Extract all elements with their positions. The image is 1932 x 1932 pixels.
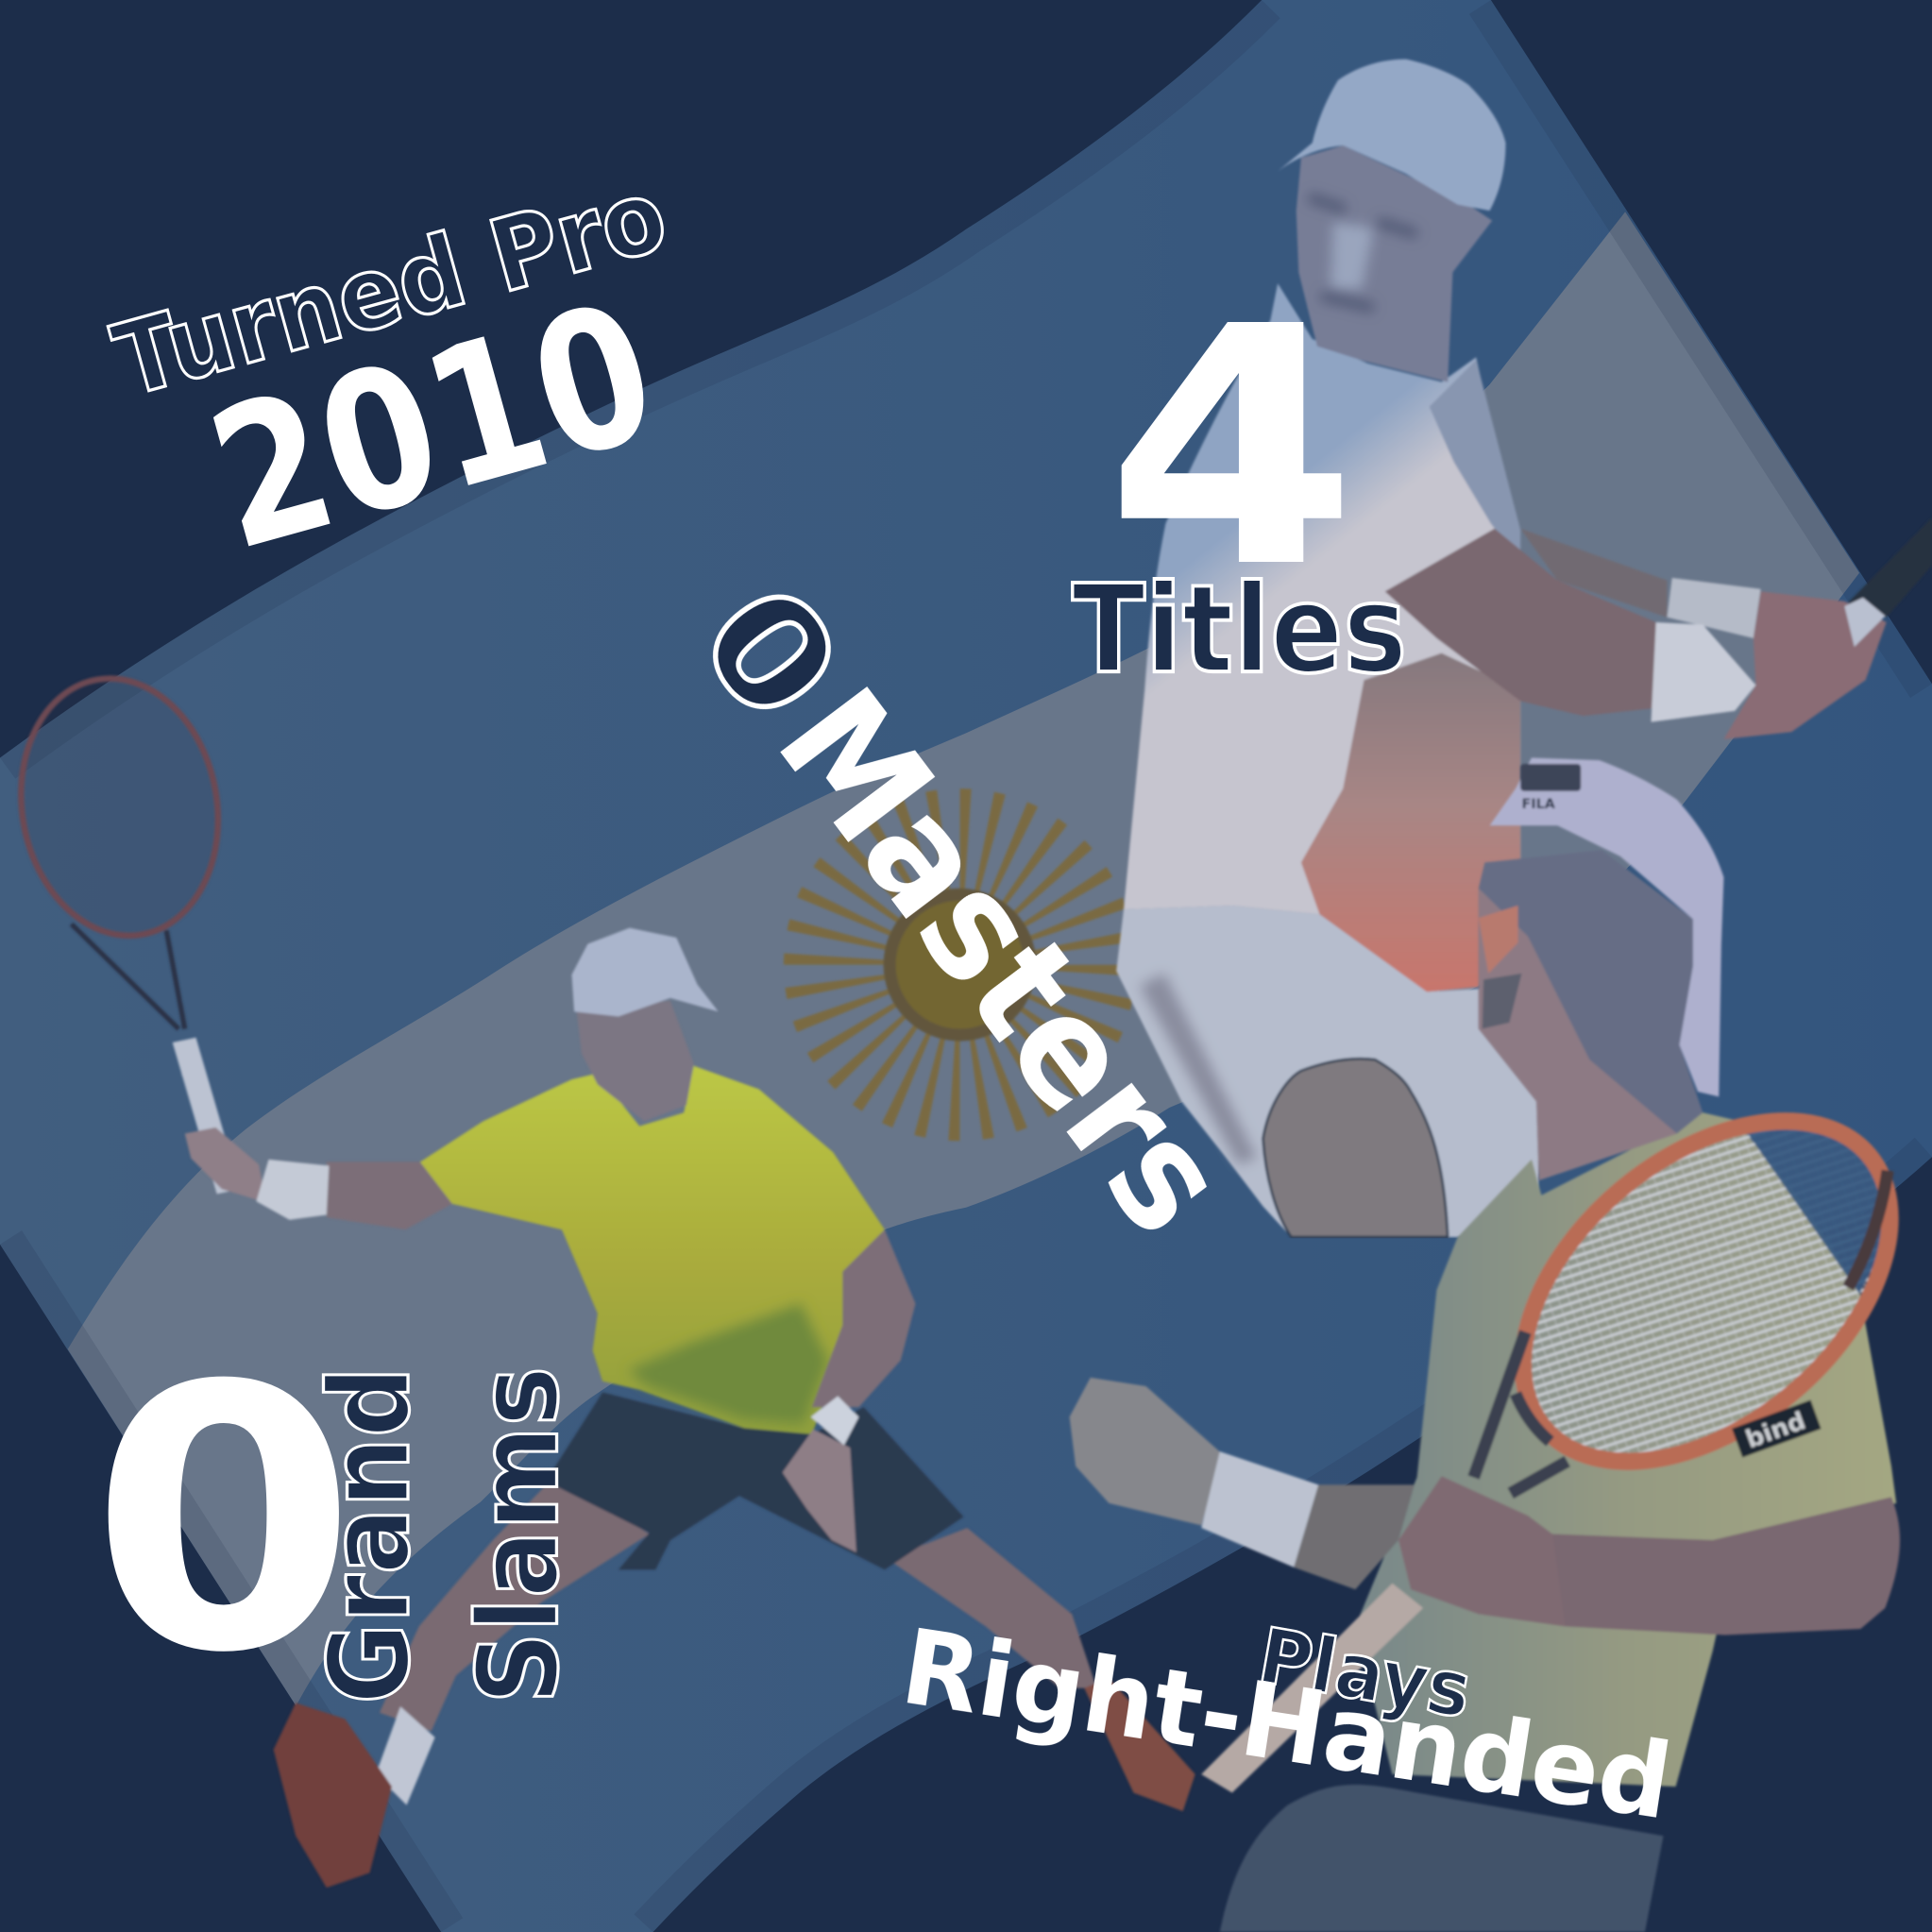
grip [1844, 598, 1885, 647]
shoe [1084, 1678, 1195, 1811]
face overlap tint [1479, 889, 1677, 1180]
head [577, 1001, 694, 1121]
shirt camouflage hem [628, 1304, 828, 1424]
face and neck [1479, 850, 1703, 1180]
racket [1467, 1110, 1900, 1500]
racket [1, 663, 238, 1029]
trousers [1220, 1785, 1664, 1932]
stat: masters [665, 555, 1261, 1265]
label: Grand: Grand [305, 1366, 434, 1704]
face highlight [1330, 222, 1374, 290]
label: Titles: Titles [1072, 559, 1407, 701]
shirt panel [1301, 653, 1520, 991]
shirt [1122, 283, 1496, 916]
hand [783, 1430, 856, 1552]
hand [185, 1127, 266, 1203]
label: Slams: Slams [454, 1366, 584, 1704]
shirt [1355, 1112, 1896, 1787]
photo: player backhand in white shirt [1116, 59, 1932, 1237]
logo: sponsor patch [1732, 1400, 1822, 1458]
number: 2010: 2010 [189, 260, 676, 593]
label: Masters: Masters [744, 659, 1261, 1265]
near leg [380, 1475, 650, 1731]
flag white stripe [68, 212, 1859, 1706]
shorts pattern [1140, 974, 1257, 1164]
wristband with logo [1651, 622, 1755, 722]
upper arm [1552, 1497, 1900, 1635]
shirt pattern [1430, 360, 1520, 562]
shoe [274, 1703, 392, 1888]
stat: plays [894, 1606, 1679, 1843]
nose tint [1479, 906, 1518, 974]
number: 4: 4 [1105, 258, 1358, 640]
back arm [1520, 529, 1667, 618]
fist [1070, 1378, 1222, 1525]
sock [376, 1706, 435, 1805]
number: 0: 0 [90, 1309, 357, 1732]
near arm [1385, 529, 1674, 716]
arm [812, 1229, 916, 1407]
shirt [420, 1066, 885, 1434]
cap [1278, 59, 1506, 211]
shorts [1116, 906, 1550, 1237]
open mouth [1483, 974, 1521, 1029]
forearm [1294, 1484, 1415, 1589]
far leg [887, 1528, 1096, 1688]
cap badge [1520, 764, 1581, 791]
cap [1490, 757, 1723, 1096]
face [1296, 145, 1492, 382]
icon: sun of May [837, 841, 1083, 1088]
stat: titles [1072, 258, 1407, 701]
logo: FILA: FILA [1521, 797, 1556, 812]
hand [1723, 591, 1887, 739]
label: Plays: Plays [1252, 1612, 1478, 1737]
racket grip [173, 1038, 240, 1194]
racket handle [1844, 517, 1932, 618]
stat: grand slams [90, 1309, 584, 1732]
stat: turned pro [102, 157, 678, 593]
wristband [256, 1160, 329, 1220]
shorts [546, 1392, 963, 1569]
wristband [1201, 1451, 1318, 1568]
label: Right-Handed: Right-Handed [894, 1606, 1679, 1843]
logo: sponsor patch: bind [1742, 1407, 1809, 1454]
wristband [1667, 578, 1761, 638]
racket handle [1201, 1584, 1423, 1793]
label: Turned Pro: Turned Pro [102, 157, 678, 419]
hand [1398, 1476, 1577, 1626]
number: 0: 0 [665, 555, 873, 753]
eyes and mouth [1309, 197, 1417, 308]
wristband [811, 1396, 858, 1446]
cap [571, 928, 719, 1016]
photo: player celebrating with racket [1070, 757, 1932, 1932]
photo: player lunging in yellow shirt [1, 663, 1195, 1888]
thigh [1263, 1059, 1448, 1237]
arm [327, 1161, 452, 1229]
